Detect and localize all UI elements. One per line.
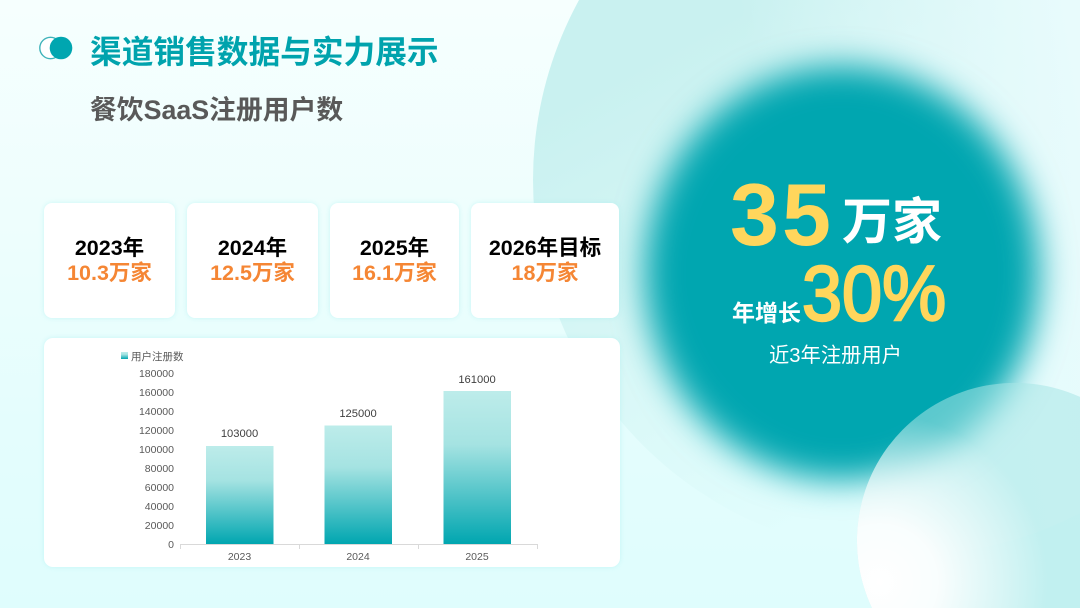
card: 2025 <box>330 203 459 318</box>
y axis labels: 80000 <box>145 463 174 475</box>
panel: bar chart card <box>44 338 620 567</box>
y axis labels: 180000 <box>139 368 174 380</box>
bar 2023: 103000 <box>221 428 258 440</box>
stat caption: 近3年注册用户 <box>769 345 902 367</box>
stat: unit: 万家 <box>842 194 942 250</box>
card: 2025: 2025年 <box>360 236 429 260</box>
bar 2024: 125000 <box>339 408 377 420</box>
card: 2023: 2023年 <box>75 236 144 260</box>
card: 2026 target: 2026年目标 <box>489 236 601 260</box>
stat: 35: 35 <box>730 165 834 264</box>
card: 2025: 16.1万家 <box>352 261 437 285</box>
bar 2024 <box>324 408 392 563</box>
bar 2025 <box>444 374 511 563</box>
bar 2025: 161000 <box>458 374 496 386</box>
card: 2024: 12.5万家 <box>210 261 295 285</box>
bar 2025: 2025 <box>465 551 489 563</box>
y axis labels: 140000 <box>139 406 174 418</box>
card: 2024 <box>187 203 318 318</box>
y axis labels: 20000 <box>145 520 174 532</box>
y axis labels: 60000 <box>145 482 174 494</box>
title: 渠道销售数据与实力展示 <box>90 34 439 70</box>
bar 2024: 2024 <box>346 551 370 563</box>
x axis <box>180 544 538 549</box>
bar 2023: 2023 <box>228 551 251 563</box>
stat: growth label: 年增长 <box>732 300 801 326</box>
y axis labels <box>139 368 174 551</box>
y axis labels: 0 <box>168 539 174 551</box>
stat: 30%: 30% <box>802 251 946 337</box>
card: 2026 target: 18万家 <box>512 261 578 285</box>
card: 2024: 2024年 <box>218 236 287 260</box>
y axis labels: 100000 <box>139 444 174 456</box>
y axis labels: 40000 <box>145 501 174 513</box>
y axis labels: 160000 <box>139 387 174 399</box>
bar 2023 <box>206 428 274 563</box>
card: 2023 <box>44 203 175 318</box>
icon: overlapping circles <box>39 36 72 60</box>
card: 2026 target <box>471 203 619 318</box>
y axis labels: 120000 <box>139 425 174 437</box>
subtitle: 餐饮SaaS注册用户数 <box>90 95 343 125</box>
card: 2023: 10.3万家 <box>67 261 152 285</box>
chart legend: 用户注册数 <box>131 350 184 363</box>
